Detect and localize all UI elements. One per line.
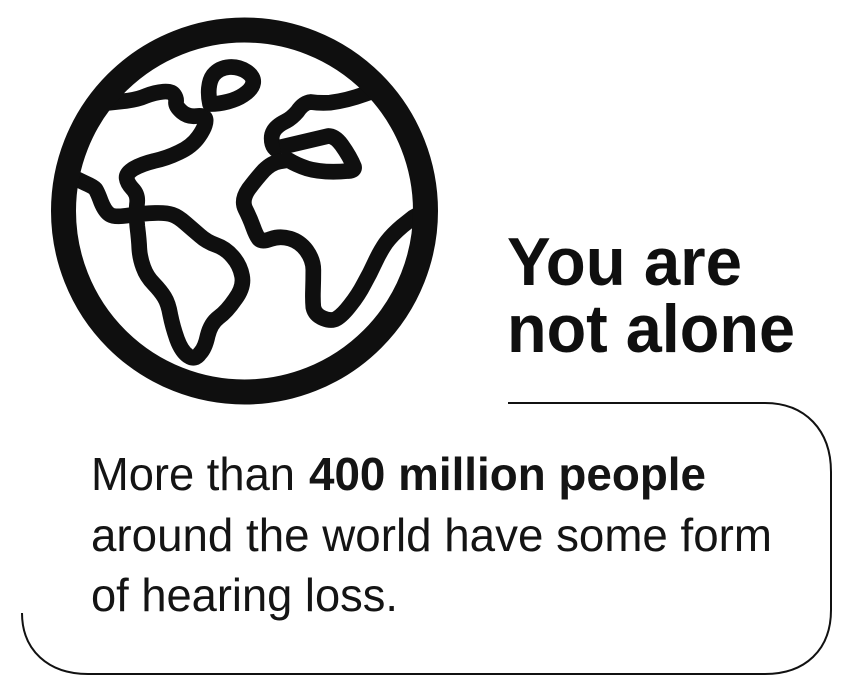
globe continents xyxy=(67,67,423,358)
body text: 400 million people xyxy=(309,448,706,500)
body text: of hearing loss. xyxy=(91,569,398,621)
heading: not alone xyxy=(507,291,795,367)
heading: You are xyxy=(507,224,742,300)
body text xyxy=(91,448,772,621)
icon: globe xyxy=(64,30,426,392)
body text: More than xyxy=(91,448,295,500)
globe outline xyxy=(64,30,426,392)
body text: around the world have some form xyxy=(91,509,772,561)
callout border xyxy=(22,403,831,674)
heading xyxy=(507,224,795,367)
